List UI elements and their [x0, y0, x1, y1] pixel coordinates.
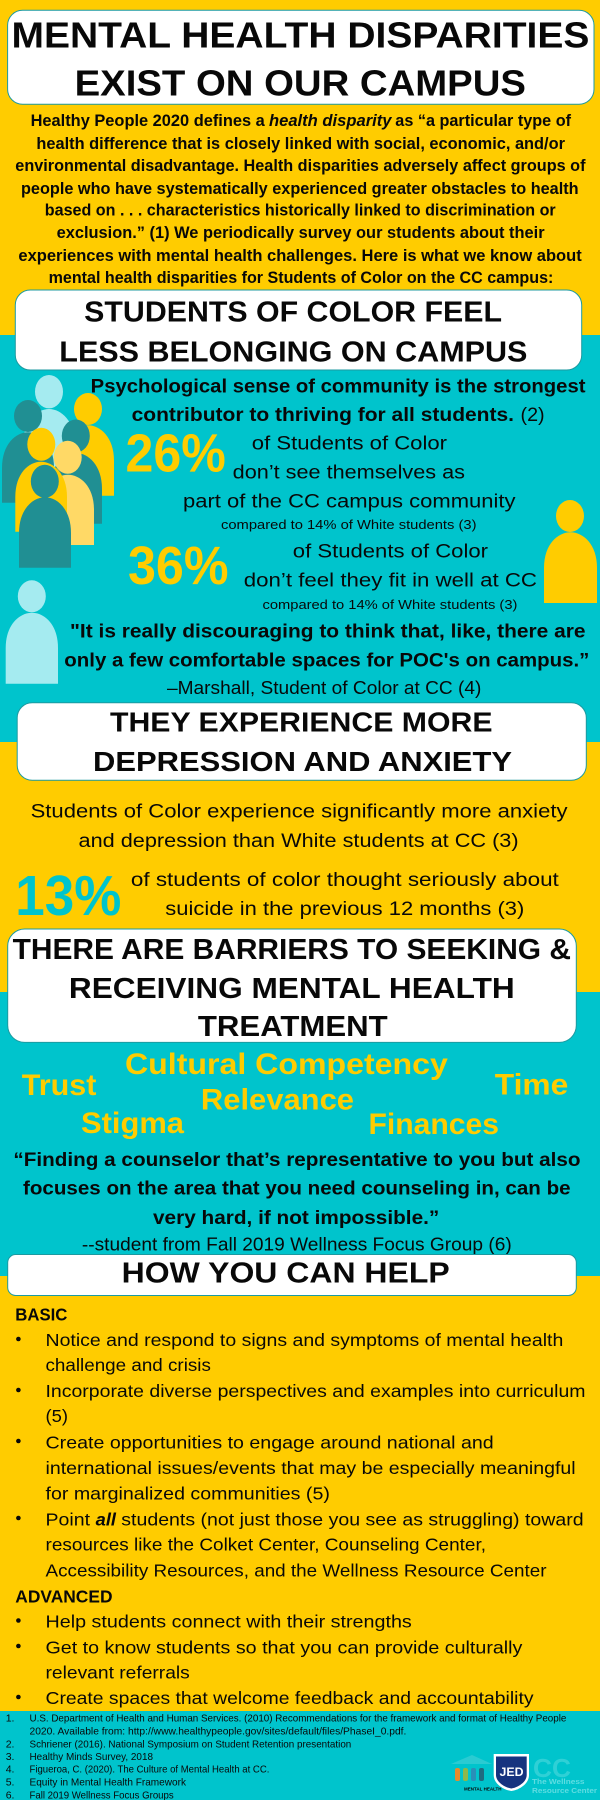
list: basic actions: Notice and respond to signs and symptoms of mental health — [46, 1330, 563, 1350]
statistic: 26 percent — [126, 424, 516, 532]
quote: Marshall — [64, 620, 589, 698]
intro text block: mental health disparities for Students of Color on the CC campus: — [49, 269, 553, 287]
logo: The Wellness Resource Center: CC — [533, 1753, 571, 1783]
logo: mental health figures — [451, 1755, 502, 1792]
list: advanced actions: Get to know students so that you can provide culturally — [46, 1637, 523, 1657]
quote: focus group student — [13, 1149, 581, 1254]
statistic: 13 percent: of students of color thought seriously about — [131, 869, 559, 891]
list: basic actions: BASIC — [15, 1304, 68, 1324]
logo: JED — [494, 1754, 529, 1791]
heading: barriers — [8, 929, 576, 1043]
quote: focus group student: --student from Fall 2019 Wellness Focus Group (6) — [82, 1234, 512, 1254]
title — [8, 10, 594, 104]
list: basic actions: students (not just those you see as struggling) toward — [121, 1510, 584, 1530]
references: Healthy Minds Survey, 2018 — [30, 1751, 153, 1763]
statistic: 26 percent: don’t see themselves as — [233, 461, 465, 483]
intro text block — [15, 112, 586, 287]
heading: students of color feel less belonging: LESS BELONGING ON CAMPUS — [59, 337, 527, 369]
icon: group of people — [2, 375, 114, 568]
barrier word cloud: Cultural Competency — [125, 1048, 448, 1081]
references: U.S. Department of Health and Human Services. (2010) Recommendations for the framework and format of Healthy People — [30, 1713, 567, 1725]
statistic: 26 percent: 26% — [126, 424, 226, 484]
references: 2020. Available from: http://www.healthypeople.gov/sites/default/files/PhaseI_0.pdf. — [30, 1725, 406, 1737]
statistic: 13 percent: suicide in the previous 12 months (3) — [165, 898, 524, 920]
heading: more depression and anxiety — [17, 703, 586, 780]
community statement: Psychological sense of community is the strongest — [91, 376, 586, 398]
list: basic actions: Incorporate diverse perspectives and examples into curriculum — [46, 1381, 586, 1401]
icon: light blue person — [6, 580, 58, 684]
logo: mental health figures: MENTAL HEALTH — [464, 1786, 502, 1792]
heading: how you can help: HOW YOU CAN HELP — [122, 1257, 450, 1289]
heading: barriers: TREATMENT — [198, 1011, 388, 1043]
list: advanced actions — [15, 1586, 534, 1708]
quote: Marshall: –Marshall, Student of Color at CC (4) — [167, 678, 481, 698]
list: basic actions: (5) — [46, 1406, 68, 1426]
statistic: 36 percent: of Students of Color — [293, 540, 489, 562]
statistic: 26 percent: part of the CC campus community — [183, 491, 516, 513]
heading: students of color feel less belonging: STUDENTS OF COLOR FEEL — [84, 297, 502, 329]
quote: focus group student: focuses on the area that you need counseling in, can be — [23, 1178, 571, 1200]
heading: barriers: RECEIVING MENTAL HEALTH — [69, 973, 515, 1005]
references: 1. — [6, 1713, 14, 1725]
barrier word cloud: Time — [495, 1068, 568, 1102]
intro text block: based on . . . characteristics historically linked to discrimination or — [45, 202, 556, 220]
references — [6, 1713, 567, 1800]
intro text block: environmental disadvantage. Health disparities adversely affect groups of — [15, 157, 586, 175]
barrier word cloud: Finances — [368, 1108, 499, 1141]
references: 4. — [6, 1764, 14, 1776]
list: basic actions: Point — [46, 1510, 90, 1530]
anxiety and depression text: and depression than White students at CC (3) — [78, 830, 519, 852]
references: 3. — [6, 1751, 14, 1763]
statistic: 13 percent: 13% — [15, 864, 121, 928]
heading: how you can help — [8, 1254, 576, 1296]
references: Equity in Mental Health Framework — [30, 1777, 187, 1789]
community statement — [91, 376, 586, 426]
statistic: 13 percent — [15, 864, 559, 928]
icon: yellow person — [544, 500, 597, 603]
statistic: 26 percent: of Students of Color — [252, 432, 448, 454]
logo: The Wellness Resource Center — [532, 1753, 597, 1795]
references: 5. — [6, 1777, 14, 1789]
list: basic actions: resources like the Colket Center, Counseling Center, — [46, 1535, 486, 1555]
anxiety and depression text: Students of Color experience significantly more anxiety — [31, 801, 568, 823]
heading: more depression and anxiety: THEY EXPERIENCE MORE — [110, 707, 492, 738]
list: basic actions — [15, 1304, 586, 1581]
references: Schriener (2016). National Symposium on Student Retention presentation — [30, 1739, 351, 1751]
barrier word cloud — [22, 1048, 568, 1141]
references: 2. — [6, 1739, 14, 1751]
statistic: 36 percent: don’t feel they fit in well at CC — [244, 570, 537, 592]
list: basic actions: Create opportunities to engage around national and — [46, 1432, 494, 1452]
intro text block: health difference that is closely linked with social, economic, and/or — [36, 135, 566, 153]
community statement: (2) — [520, 404, 545, 426]
intro text block: people who have systematically experienced greater obstacles to health — [21, 180, 579, 198]
list: basic actions: for marginalized communities (5) — [46, 1483, 330, 1503]
title: MENTAL HEALTH DISPARITIES — [12, 15, 589, 56]
quote: Marshall: "It is really discouraging to think that, like, there are — [70, 620, 586, 642]
quote: focus group student: very hard, if not impossible.” — [153, 1207, 439, 1229]
anxiety and depression text — [31, 801, 568, 852]
list: advanced actions: Help students connect with their strengths — [46, 1612, 412, 1632]
list: advanced actions: ADVANCED — [15, 1586, 112, 1606]
list: basic actions: all — [96, 1510, 117, 1530]
statistic: 36 percent: 36% — [128, 536, 228, 596]
list: basic actions: Accessibility Resources, and the Wellness Resource Center — [46, 1561, 547, 1581]
intro text block: exclusion.” (1) We periodically survey our students about their — [57, 224, 545, 242]
title: EXIST ON OUR CAMPUS — [75, 62, 526, 103]
logo: The Wellness Resource Center: The Wellness — [532, 1777, 584, 1786]
list: basic actions: challenge and crisis — [46, 1355, 211, 1375]
statistic: 26 percent: compared to 14% of White students (3) — [221, 517, 476, 532]
intro text block: Healthy People 2020 defines a — [31, 112, 266, 130]
statistic: 36 percent — [128, 536, 537, 612]
references: Figueroa, C. (2020). The Culture of Mental Health at CC. — [30, 1764, 269, 1776]
heading: more depression and anxiety: DEPRESSION AND ANXIETY — [93, 746, 512, 777]
logo: JED: JED — [500, 1765, 524, 1779]
intro text block: health disparity — [269, 112, 392, 130]
intro text block: experiences with mental health challenges. Here is what we know about — [18, 247, 582, 265]
intro text block: as “a particular type of — [395, 112, 571, 130]
list: advanced actions: relevant referrals — [46, 1662, 190, 1682]
barrier word cloud: Trust — [22, 1069, 96, 1102]
heading: students of color feel less belonging — [15, 290, 582, 370]
list: basic actions: international issues/events that may be especially meaningful — [46, 1458, 576, 1478]
barrier word cloud: Relevance — [201, 1084, 354, 1117]
community statement: contributor to thriving for all students. — [132, 404, 514, 426]
quote: focus group student: “Finding a counselor that’s representative to you but also — [13, 1149, 581, 1171]
barrier word cloud: Stigma — [81, 1107, 184, 1140]
statistic: 36 percent: compared to 14% of White students (3) — [262, 597, 517, 612]
list: advanced actions: Create spaces that welcome feedback and accountability — [46, 1688, 534, 1708]
logo: The Wellness Resource Center: Resource Center — [532, 1786, 597, 1795]
quote: Marshall: only a few comfortable spaces for POC's on campus.” — [64, 650, 589, 672]
heading: barriers: THERE ARE BARRIERS TO SEEKING & — [13, 934, 571, 966]
